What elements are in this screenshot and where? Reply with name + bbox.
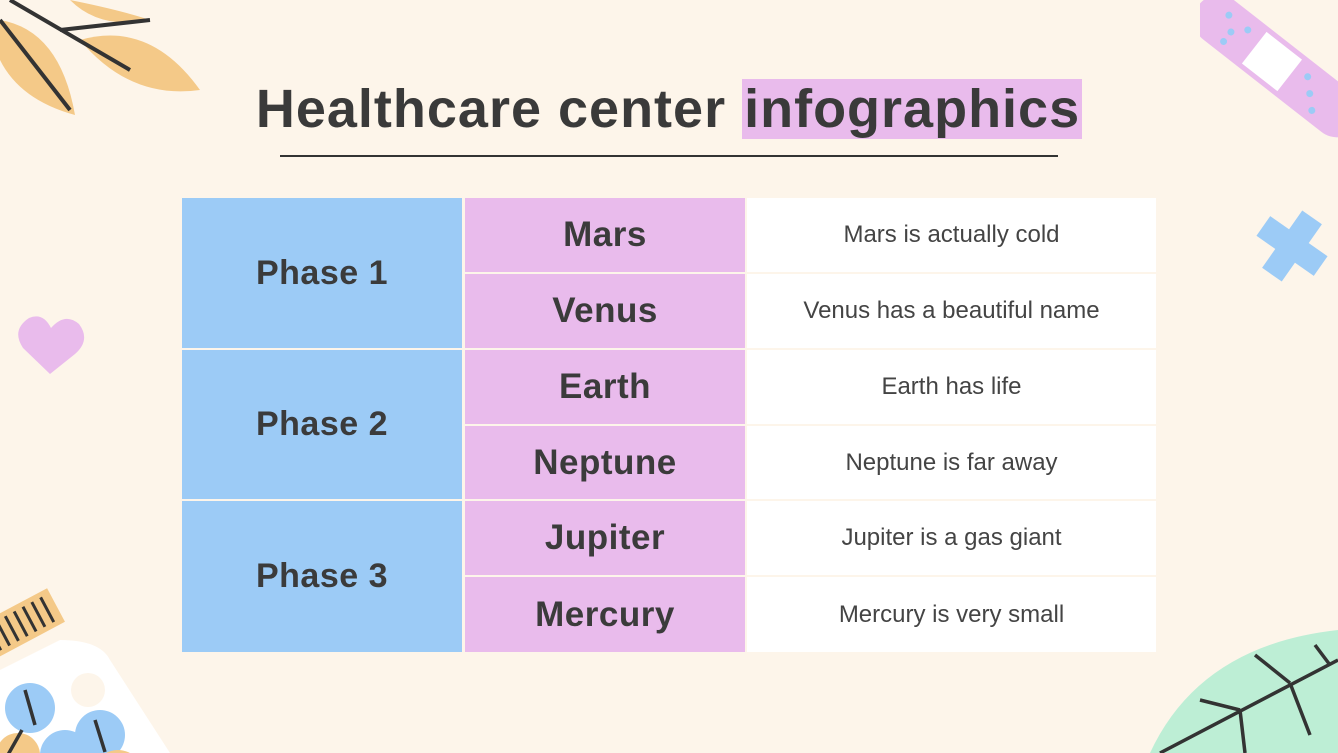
planet: Venus: Venus — [552, 291, 658, 330]
planet: Jupiter: Jupiter — [545, 518, 665, 557]
desc: Earth — [747, 350, 1156, 424]
desc: Neptune: Neptune is far away — [845, 448, 1058, 476]
planet: Mars: Mars — [563, 215, 647, 254]
planet: Venus — [465, 274, 745, 348]
decoration: leaves top-left — [0, 0, 200, 115]
desc: Mercury — [747, 577, 1156, 652]
phase 1 — [182, 198, 462, 348]
desc: Jupiter — [747, 501, 1156, 575]
planet: Neptune: Neptune — [533, 442, 677, 482]
planet: Jupiter — [465, 501, 745, 575]
decoration: heart — [18, 316, 84, 374]
decoration: blue cross — [1256, 210, 1328, 282]
planet: Mercury: Mercury — [535, 594, 675, 634]
title: Healthcare center infographics — [256, 79, 1080, 139]
planet: Earth — [465, 350, 745, 424]
phase 1: Phase 1 — [256, 254, 388, 292]
decoration: pills bottom-left — [0, 588, 170, 753]
desc: Mars — [747, 198, 1156, 272]
phase 3: Phase 3 — [256, 557, 388, 595]
desc: Neptune — [747, 426, 1156, 499]
desc: Venus — [747, 274, 1156, 348]
title underline — [280, 155, 1058, 157]
planet: Mars — [465, 198, 745, 272]
desc: Venus: Venus has a beautiful name — [803, 297, 1100, 324]
table — [182, 198, 1156, 652]
phase 3 — [182, 501, 462, 652]
desc: Jupiter: Jupiter is a gas giant — [841, 524, 1062, 551]
desc: Earth: Earth has life — [881, 373, 1022, 400]
phase 2 — [182, 350, 462, 499]
planet: Neptune — [465, 426, 745, 499]
phase 2: Phase 2 — [256, 405, 388, 443]
decoration: green leaf bottom-right — [1150, 630, 1338, 753]
desc: Mars: Mars is actually cold — [843, 221, 1060, 248]
planet: Mercury — [465, 577, 745, 652]
desc: Mercury: Mercury is very small — [839, 600, 1064, 628]
decoration: bandage top-right — [1200, 0, 1338, 138]
planet: Earth: Earth — [559, 367, 651, 406]
